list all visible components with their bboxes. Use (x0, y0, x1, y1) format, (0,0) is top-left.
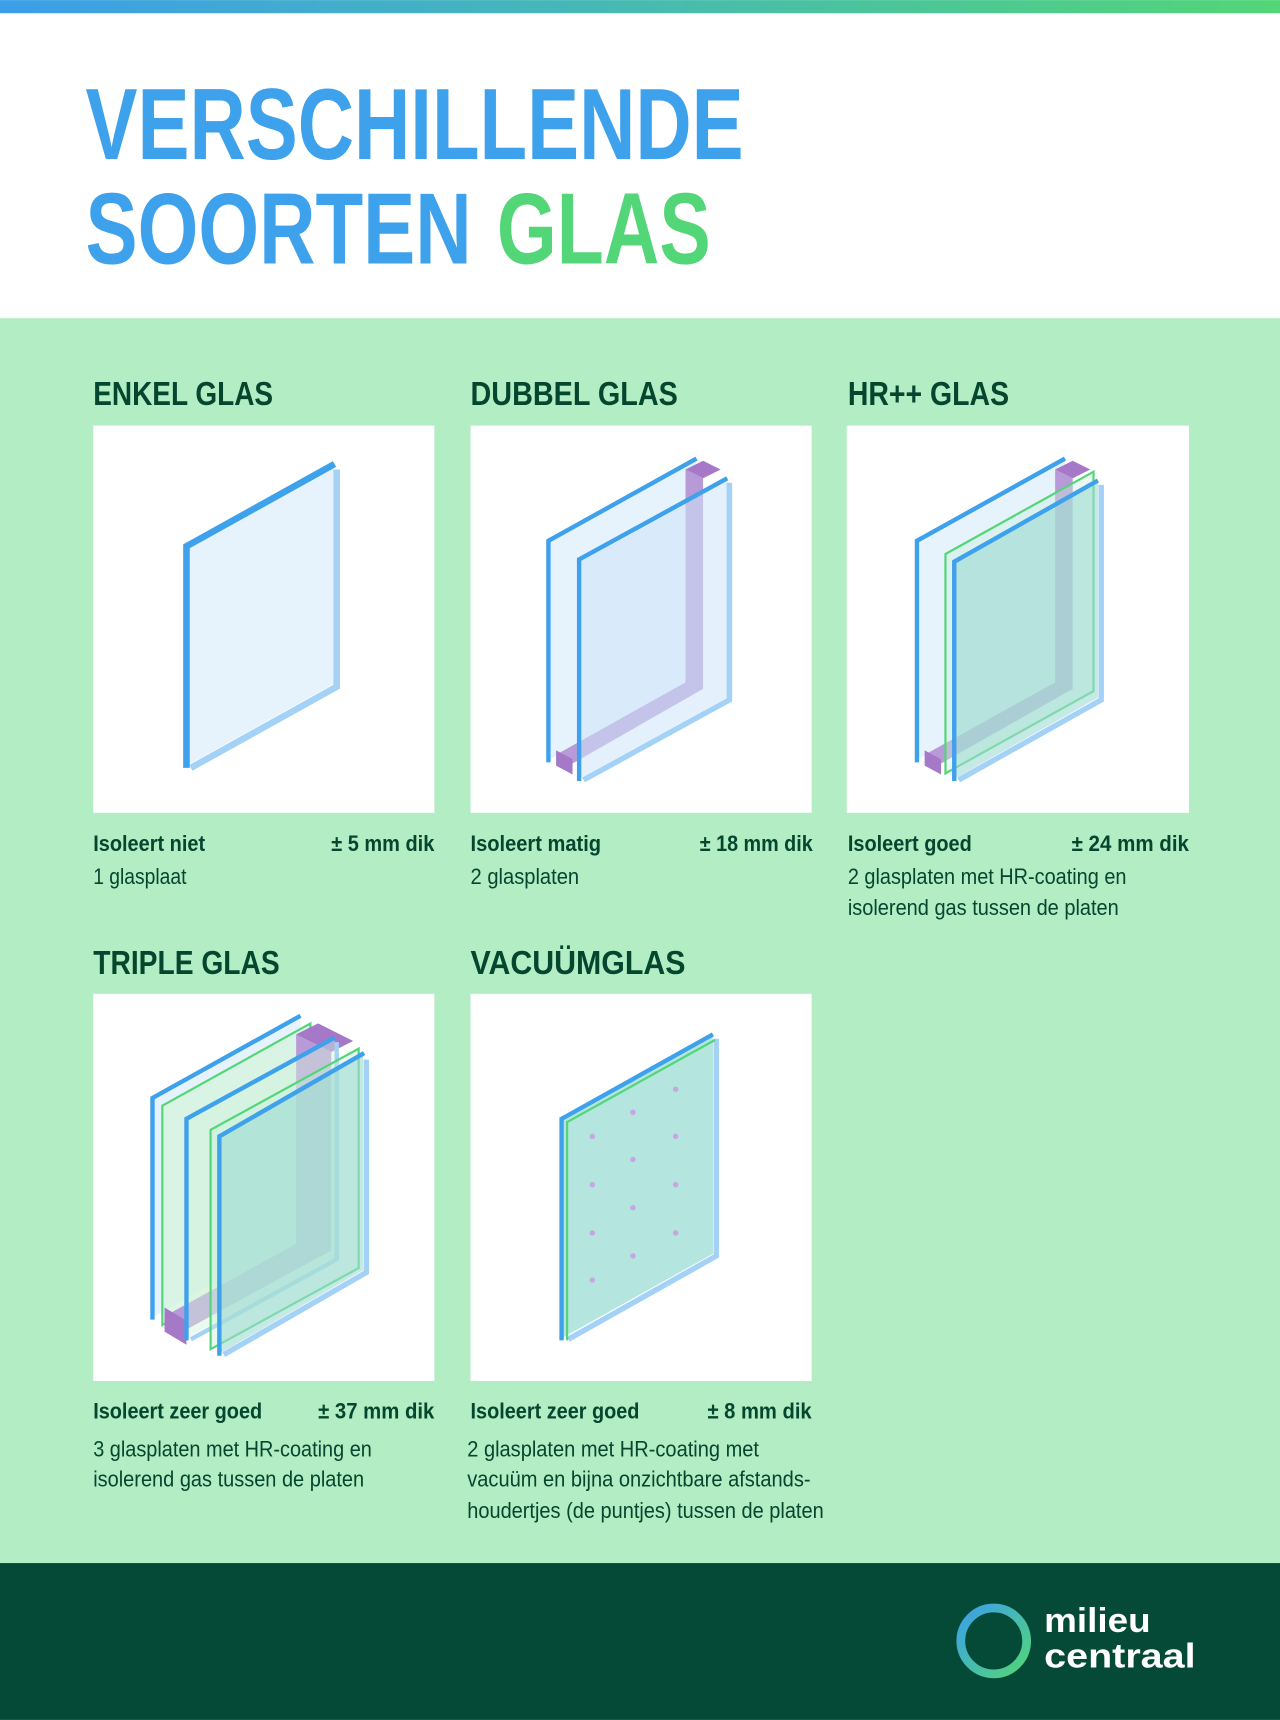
icon: double pane (548, 459, 729, 781)
logo: milieu centraal (961, 1602, 1196, 1675)
icon: hr++ pane (917, 459, 1101, 781)
panel: triple glas: TRIPLE GLAS (93, 944, 280, 981)
logo: milieu centraal: centraal (1044, 1637, 1196, 1675)
top gradient bar (0, 0, 1280, 13)
panel: enkel glas: 1 glasplaat (93, 864, 186, 889)
panel: hr++ glas: ± 24 mm dik (1072, 831, 1190, 856)
panel: dubbel glas: Isoleert matig (471, 831, 601, 856)
title: GLAS (497, 173, 711, 285)
icon: triple pane (152, 1016, 366, 1356)
panel: enkel glas: ENKEL GLAS (93, 375, 273, 412)
panel: triple glas: isolerend gas tussen de platen (93, 1466, 364, 1491)
panel: enkel glas: ± 5 mm dik (331, 831, 435, 856)
panel: triple glas: ± 37 mm dik (318, 1398, 435, 1423)
logo: milieu centraal: milieu (1044, 1602, 1151, 1640)
panel: triple glas: 3 glasplaten met HR-coating en (93, 1437, 372, 1462)
green content area (0, 318, 1280, 1563)
panel: hr++ glas (847, 375, 1190, 920)
panel: vacuumglas: VACUÜMGLAS (471, 944, 686, 981)
panel: hr++ glas: HR++ GLAS (848, 375, 1009, 412)
panel: dubbel glas (471, 375, 813, 889)
panel: dubbel glas: 2 glasplaten (471, 864, 579, 889)
panel: hr++ glas: 2 glasplaten met HR-coating en (848, 864, 1126, 889)
icon: single pane (186, 464, 337, 768)
panel: triple glas (93, 944, 435, 1491)
title: VERSCHILLENDE (86, 69, 744, 181)
panel: enkel glas (93, 375, 435, 889)
panel: vacuumglas: ± 8 mm dik (707, 1398, 812, 1423)
title (86, 69, 744, 285)
icon: vacuum pane (562, 1034, 716, 1340)
footer (0, 1563, 1280, 1720)
panel: enkel glas: Isoleert niet (93, 831, 206, 856)
panel: dubbel glas: DUBBEL GLAS (471, 375, 678, 412)
panel: vacuumglas: houdertjes (de puntjes) tussen de platen (467, 1498, 824, 1523)
panel: dubbel glas: ± 18 mm dik (700, 831, 813, 856)
title: SOORTEN (86, 173, 472, 285)
panel: hr++ glas: Isoleert goed (848, 831, 972, 856)
panel: hr++ glas: isolerend gas tussen de platen (848, 895, 1119, 920)
panel: vacuumglas (467, 944, 824, 1523)
panel: triple glas: Isoleert zeer goed (93, 1398, 262, 1423)
panel: vacuumglas: Isoleert zeer goed (471, 1398, 639, 1423)
panel: vacuumglas: 2 glasplaten met HR-coating met (467, 1437, 759, 1462)
panel: vacuumglas: vacuüm en bijna onzichtbare afstands- (467, 1466, 811, 1491)
